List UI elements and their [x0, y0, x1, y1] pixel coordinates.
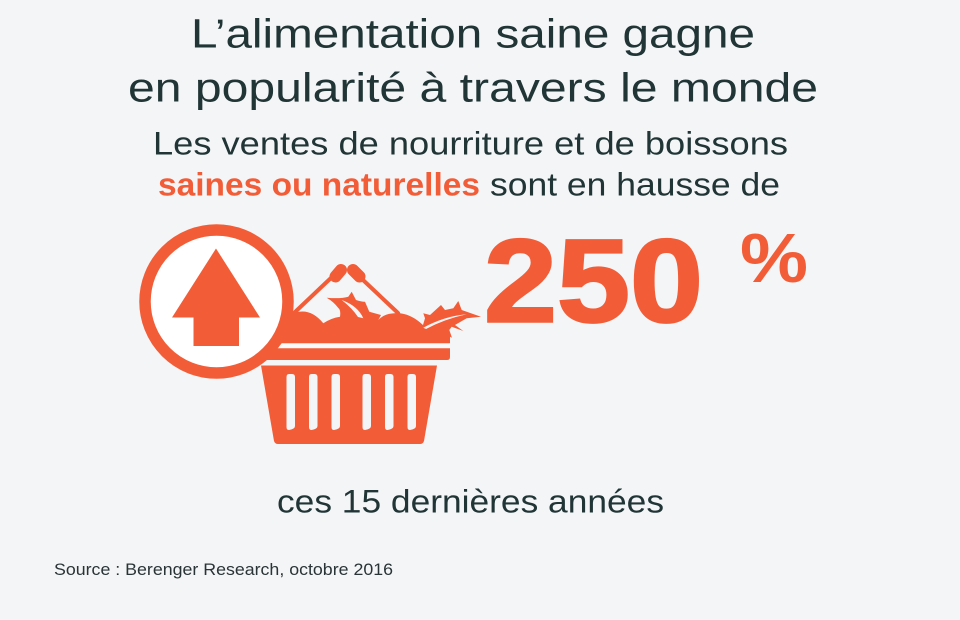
source: Source : Berenger Research, octobre 2016 — [54, 560, 393, 579]
stat: 250 %: 250 — [484, 216, 703, 348]
basket body — [261, 366, 437, 444]
subtitle — [153, 126, 788, 202]
title: L’alimentation saine gagne — [191, 10, 755, 56]
basket handle — [294, 270, 398, 313]
stat: 250 % — [484, 216, 808, 348]
subtitle: saines ou naturelles — [158, 166, 480, 202]
icon: up arrow badge — [145, 230, 288, 373]
stat: 250 %: % — [740, 219, 808, 297]
subtitle: sont en hausse de — [490, 166, 780, 202]
rim stripe — [277, 343, 450, 348]
subtitle: Les ventes de nourriture et de boissons — [153, 126, 788, 162]
produce and rim — [262, 292, 481, 360]
title — [128, 10, 818, 110]
leaf veins — [342, 300, 363, 318]
title: en popularité à travers le monde — [128, 64, 818, 110]
period text: ces 15 dernières années — [277, 484, 664, 520]
icon: shopping basket — [261, 270, 481, 444]
